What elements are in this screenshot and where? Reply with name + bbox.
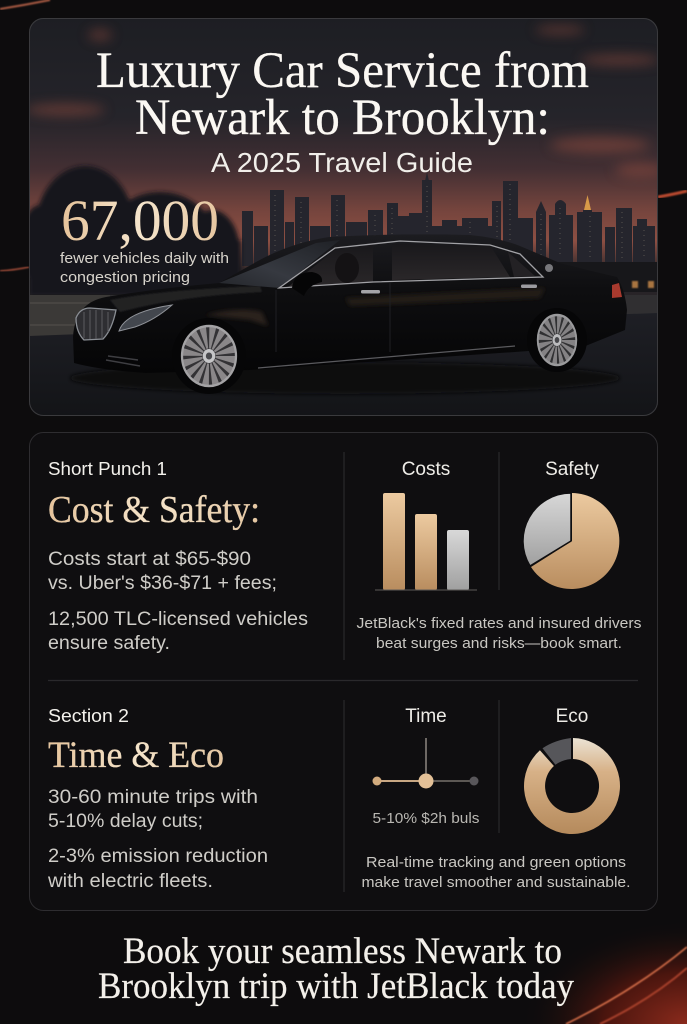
section 2 text: Time & Eco [48,735,224,776]
section 1 text: 12,500 TLC-licensed vehicles [48,609,308,630]
section 1 caption [356,615,642,652]
sunset clouds [25,26,665,177]
chart: eco donut [524,706,620,834]
footer call to action: Brooklyn trip with JetBlack today [98,966,574,1007]
section 2 caption [362,854,630,891]
headlight [119,305,172,331]
section 2 caption: Real-time tracking and green options [366,854,626,871]
chart: safety pie: Safety [545,459,599,480]
far lights [632,281,654,288]
footer call to action [98,931,574,1007]
trees [20,166,241,296]
chart: costs bars [375,459,477,590]
icon: limousine [73,234,627,394]
title [96,43,589,146]
tail light [612,283,622,298]
shadow [70,362,620,394]
chart: time timeline: Time [405,706,447,727]
section 2 text: Section 2 [48,706,129,726]
panel dividers [48,452,638,892]
rear door window [392,256,510,280]
panel: hero photo [20,18,665,416]
section 2 text [47,706,268,892]
section 1 caption: beat surges and risks—book smart. [376,635,622,652]
far shore [558,262,657,292]
section 2 text: 30-60 minute trips with [48,787,258,808]
windshield [219,240,340,288]
stat: 67,000: fewer vehicles daily with [60,250,229,267]
skyline [242,172,655,267]
section 1 text: ensure safety. [48,633,170,654]
section 1 text: vs. Uber's $36-$71 + fees; [48,573,277,594]
chart: time timeline [372,706,480,827]
grille [76,308,116,340]
sky [30,19,658,295]
title: Luxury Car Service from [96,43,589,99]
section 1 text [48,459,308,654]
section 2 text: with electric fleets. [47,871,213,892]
front wheel [180,318,238,394]
stat: 67,000: congestion pricing [60,269,190,286]
section 1 text: Costs start at $65-$90 [48,549,251,570]
title: Newark to Brooklyn: [135,90,550,146]
panel: data sections [30,432,658,910]
body reflection [345,288,545,306]
door mirror [292,272,322,296]
skyline lights [275,184,644,262]
section 2 caption: make travel smoother and sustainable. [362,874,630,891]
roadside wall [110,295,657,314]
rocker chrome [258,346,515,368]
section 1 text: Cost & Safety: [48,489,260,531]
subtitle: A 2025 Travel Guide [211,147,473,178]
chart: eco donut: Eco [556,706,588,727]
chart: costs bars: Costs [402,459,450,480]
stat: 67,000 [60,201,228,285]
front door window [288,258,373,287]
footer call to action: Book your seamless Newark to [123,931,562,972]
section 1 caption: JetBlack's fixed rates and insured drivers [356,615,642,632]
quarter window [508,252,535,277]
section 2 text: 5-10% delay cuts; [48,811,203,832]
road [32,313,657,336]
chart: time timeline: 5-10% $2h buls [372,810,480,827]
hood highlight [110,286,262,312]
window chrome [279,241,543,288]
rear wheel [529,314,586,372]
stat: 67,000: 67,000 [61,188,219,253]
chart: safety pie [523,459,619,589]
hero border [30,18,658,416]
section 1 text: Short Punch 1 [48,459,167,479]
section 2 text: 2-3% emission reduction [48,846,268,867]
